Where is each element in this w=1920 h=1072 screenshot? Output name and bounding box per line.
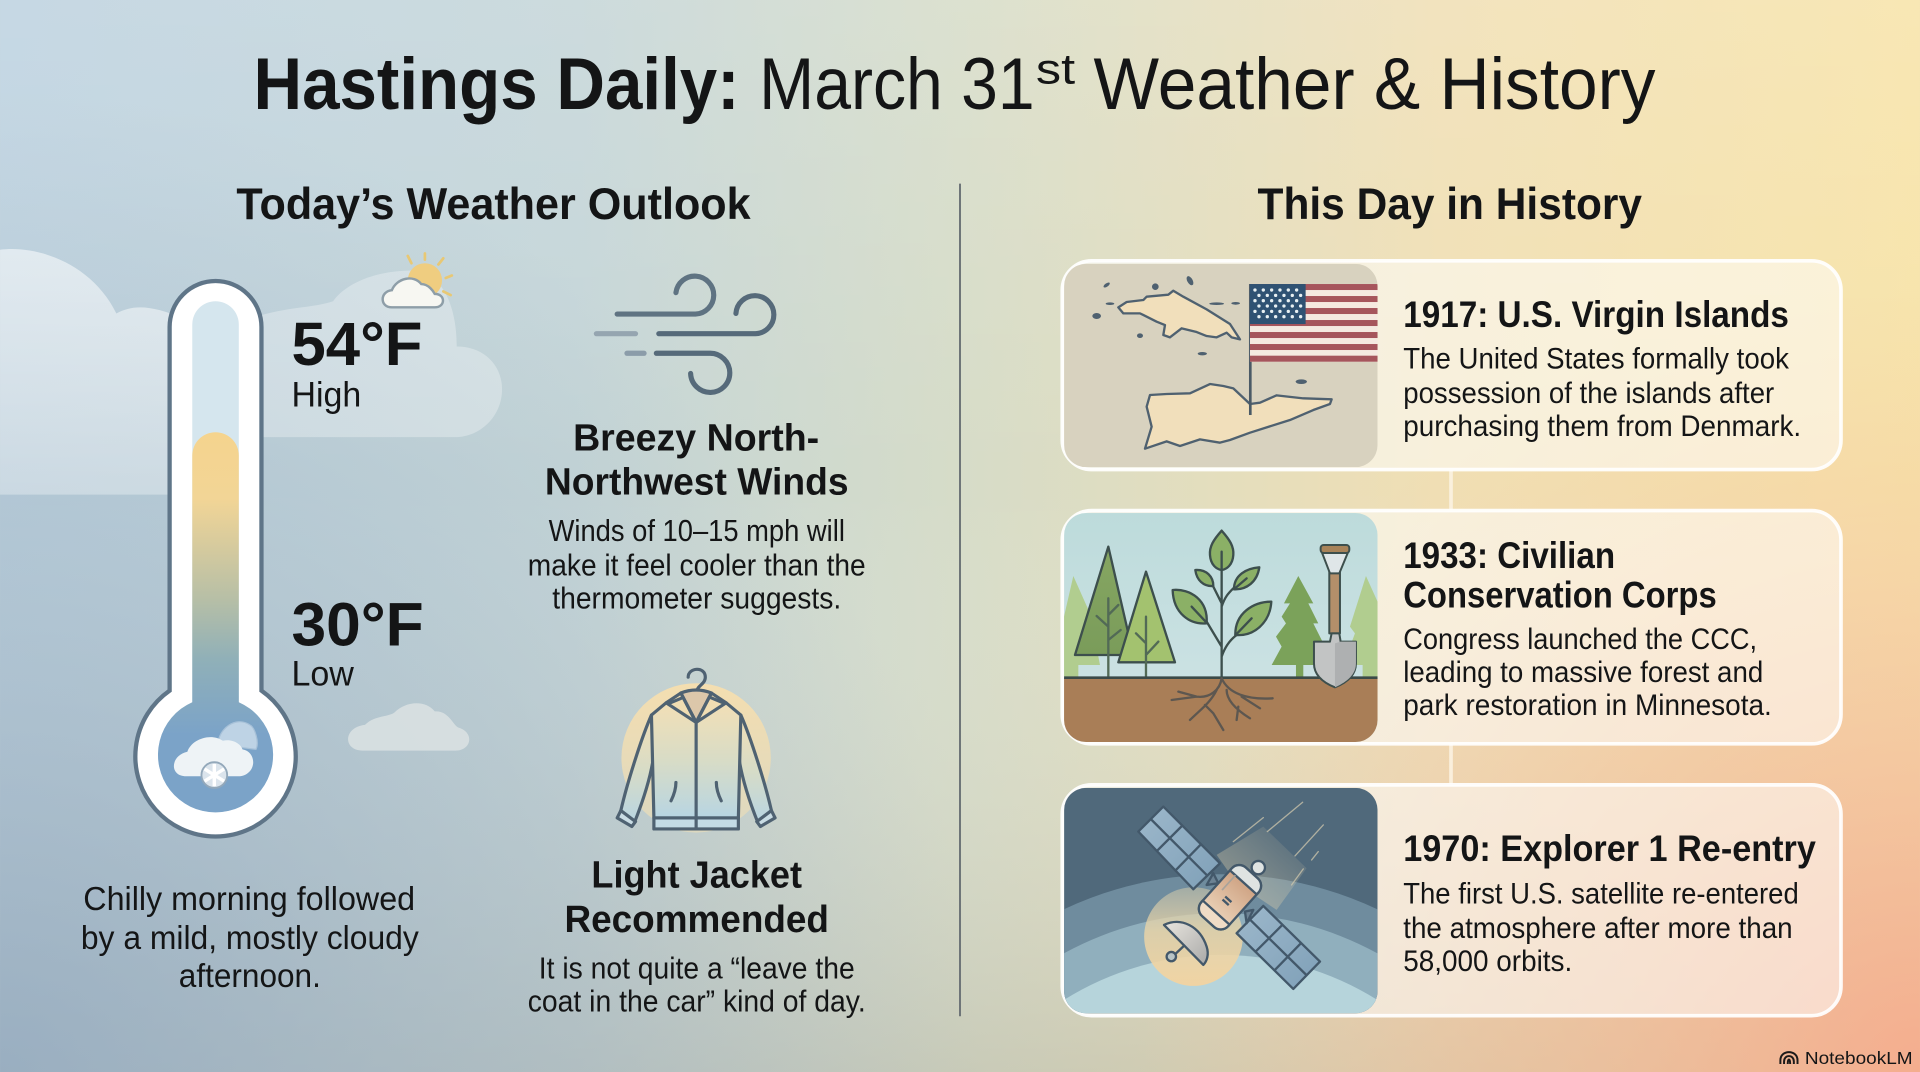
text block: jacket — [528, 855, 866, 1018]
icon: wind — [596, 276, 774, 392]
text: 1933 event: leading to massive forest and — [1403, 656, 1763, 689]
title: Weather & History — [1093, 42, 1656, 125]
title: Hastings Daily: — [253, 42, 740, 125]
high temperature label: High — [291, 375, 361, 415]
text: forecast summary: afternoon. — [179, 958, 321, 995]
text block: winds: Breezy North- — [573, 418, 819, 460]
illustration: forest, sapling and shovel — [1064, 513, 1379, 743]
text: 1970 event — [1403, 828, 1816, 978]
text: forecast summary: Chilly morning followed — [83, 881, 415, 918]
text: 1933 event: Conservation Corps — [1403, 574, 1717, 615]
text: forecast summary — [81, 881, 419, 995]
text: 1917 event: purchasing them from Denmark. — [1403, 410, 1801, 443]
text block: winds — [528, 418, 866, 616]
text: 1933 event: park restoration in Minnesota. — [1403, 689, 1772, 722]
high temperature label — [291, 310, 422, 415]
logo: NotebookLM: NotebookLM — [1805, 1048, 1913, 1068]
illustration: satellite re-entering atmosphere — [1064, 788, 1378, 1013]
text block: winds: Northwest Winds — [545, 462, 849, 504]
panel: 1917 U.S. Virgin Islands — [1062, 261, 1841, 470]
text: 1917 event: The United States formally took — [1403, 343, 1789, 376]
heading: today's weather outlook: Today’s Weather Outlook — [236, 180, 751, 229]
panel: weather background clouds — [0, 249, 502, 751]
panel: 1970 Explorer 1 re-entry — [1062, 785, 1841, 1016]
text: 1970 event: The first U.S. satellite re-entered — [1403, 878, 1799, 911]
text: 1917 event — [1403, 294, 1801, 443]
text: 1917 event: possession of the islands after — [1403, 377, 1774, 410]
low temperature label — [291, 590, 424, 694]
text block: jacket: Recommended — [565, 899, 829, 941]
text: 1933 event: 1933: Civilian — [1403, 535, 1615, 576]
title — [253, 42, 1656, 125]
text block: jacket: Light Jacket — [591, 855, 802, 897]
icon: jacket on hanger — [617, 669, 775, 833]
illustration: islands map and flag — [1064, 264, 1378, 467]
timeline connectors — [1450, 470, 1453, 784]
center divider — [959, 184, 961, 1016]
low temperature label: Low — [291, 654, 354, 694]
icon: thermometer — [135, 281, 296, 837]
title: st — [1036, 45, 1075, 93]
text: 1917 event: 1917: U.S. Virgin Islands — [1403, 294, 1789, 335]
text: 1933 event: Congress launched the CCC, — [1403, 623, 1757, 656]
text: 1970 event: 1970: Explorer 1 Re-entry — [1403, 828, 1816, 869]
text: 1970 event: 58,000 orbits. — [1403, 945, 1572, 978]
text: 1933 event — [1403, 535, 1772, 722]
low temperature label: 30°F — [291, 590, 424, 658]
text block: winds: Winds of 10–15 mph will — [549, 514, 845, 548]
text block: jacket: coat in the car” kind of day. — [528, 984, 866, 1018]
high temperature label: 54°F — [291, 310, 422, 378]
text: forecast summary: by a mild, mostly cloudy — [81, 920, 419, 957]
heading: this day in history: This Day in History — [1258, 180, 1642, 229]
icon: snow cloud in bulb — [174, 722, 257, 788]
title: March 31 — [759, 42, 1035, 125]
icon: sun behind cloud — [383, 253, 452, 307]
panel: 1933 Civilian Conservation Corps — [1062, 511, 1841, 744]
text block: jacket: It is not quite a “leave the — [539, 951, 855, 985]
text block: winds: make it feel cooler than the — [528, 548, 866, 582]
text: 1970 event: the atmosphere after more than — [1403, 912, 1793, 945]
text block: winds: thermometer suggests. — [552, 582, 841, 616]
